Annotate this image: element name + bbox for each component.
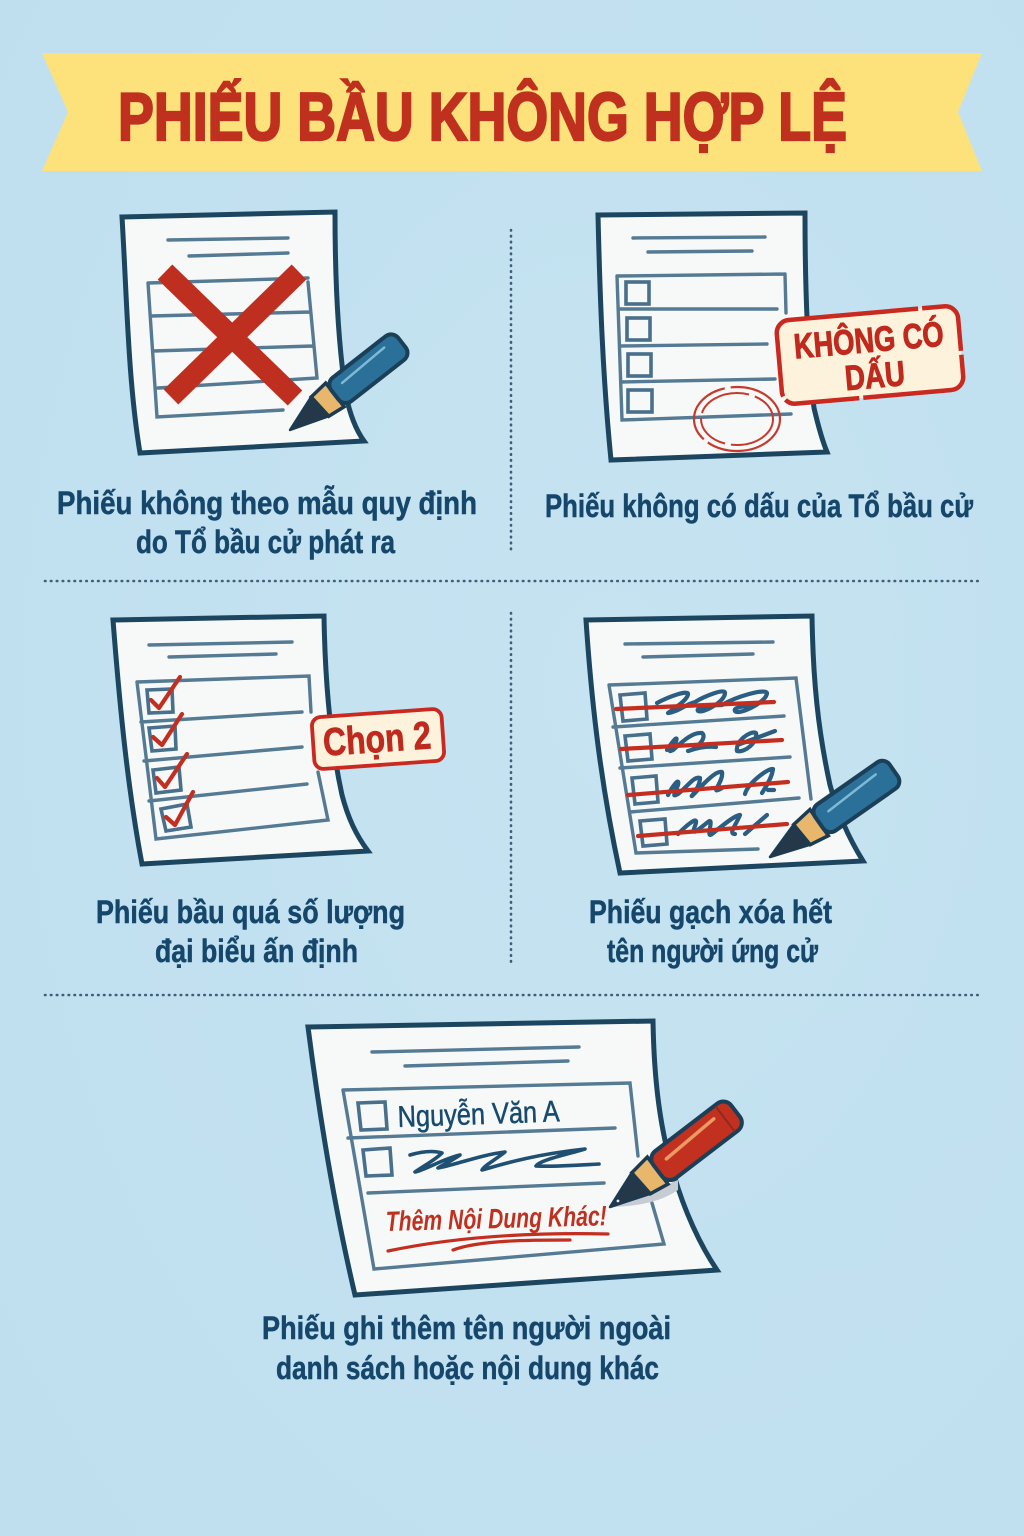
ballot paper with struck-out names [586,616,863,873]
icon: red cross [165,272,299,398]
panel: all names struck out [586,616,903,969]
caption: do Tổ bầu cử phát ra [136,524,395,560]
ballot paper with red cross [122,212,364,453]
caption: Phiếu bầu quá số lượng [96,894,405,930]
ballot paper with faint stamp [598,213,827,460]
caption: Phiếu ghi thêm tên người ngoài [262,1310,671,1346]
caption [57,485,477,560]
panel: wrong form ballot [57,212,477,560]
scribbled name [410,1149,599,1172]
ballot paper with added writing [308,1021,717,1295]
caption: danh sách hoặc nội dung khác [276,1350,659,1386]
caption: Phiếu gạch xóa hết [589,894,832,930]
callout: choose 2: Chọn 2 [322,714,432,765]
panel: ballot without stamp [545,213,974,524]
title: PHIẾU BẦU KHÔNG HỢP LỆ [118,78,847,155]
icon: blue pencil [281,331,411,442]
caption: Phiếu không theo mẫu quy định [57,485,477,521]
callout: no stamp: KHÔNG CÓ [792,314,945,367]
callout: no stamp [776,305,964,405]
icon: blue pencil [761,757,903,870]
caption: tên người ứng cử [607,933,819,969]
caption [589,894,832,969]
icon: red pencil [600,1098,746,1221]
caption [262,1310,671,1386]
caption [96,894,405,969]
panel: extra content written [262,1021,746,1386]
callout: no stamp: DẤU [843,353,906,398]
candidate name: Nguyễn Văn A [397,1095,560,1134]
panel: too many selections [96,616,445,969]
ballot paper with four checks [113,616,368,864]
added red text: Thêm Nội Dung Khác! [385,1200,607,1237]
caption: đại biểu ấn định [155,933,358,969]
title banner [42,53,982,171]
